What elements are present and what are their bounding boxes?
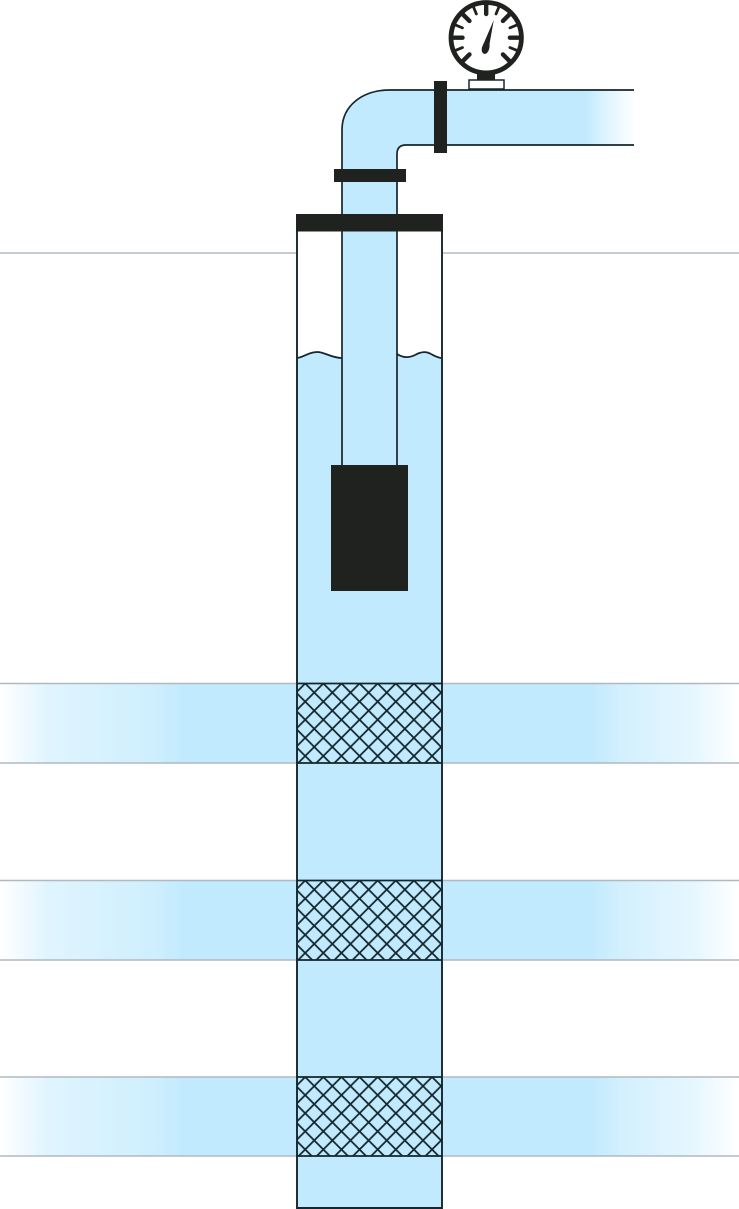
gauge needle	[482, 20, 494, 54]
well casing with water	[297, 225, 442, 1208]
gauge stem	[477, 71, 495, 80]
well screen 3	[297, 1077, 442, 1156]
ground level line	[0, 252, 739, 254]
aquifer band 2	[0, 880, 739, 960]
well screen 2	[297, 880, 442, 960]
pipe flange: vertical section	[334, 169, 406, 182]
gauge ticks	[452, 3, 521, 62]
well screen 1	[297, 684, 442, 763]
gauge dial	[451, 2, 521, 73]
gauge base	[469, 80, 504, 89]
pipe flange: horizontal section	[434, 81, 447, 153]
submersible pump	[331, 465, 408, 591]
aquifer band 1	[0, 684, 739, 763]
aquifer band 3	[0, 1077, 739, 1156]
well cap	[296, 214, 443, 232]
discharge pipe	[342, 90, 634, 465]
pressure gauge	[451, 2, 521, 89]
